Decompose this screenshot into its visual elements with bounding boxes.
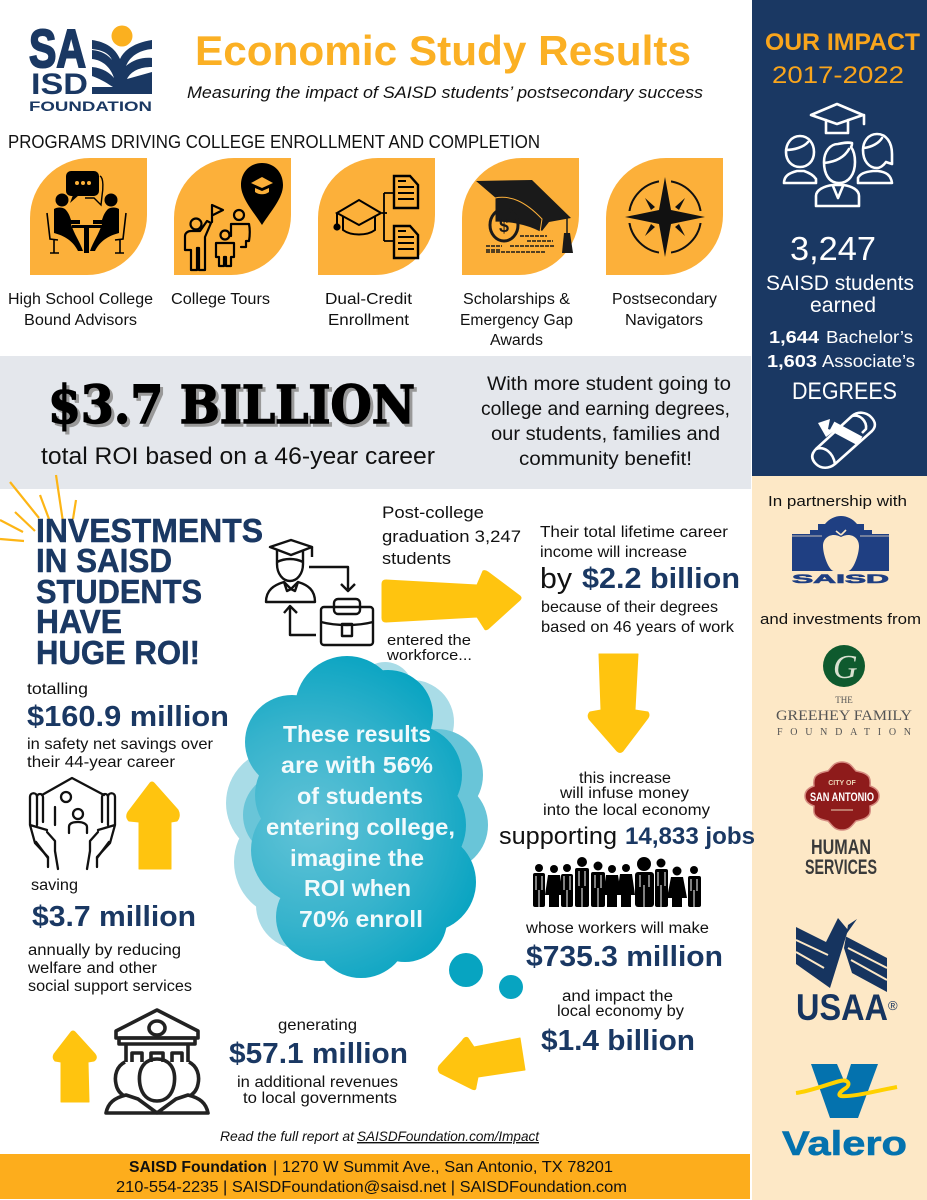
text: safety net — [27, 681, 229, 771]
footer — [0, 1154, 750, 1199]
arrow: up large — [127, 782, 179, 869]
degree counts: 1,603 — [767, 351, 817, 371]
logo: USAA — [796, 918, 898, 1028]
text: lifetime income: $2.2 billion — [582, 563, 740, 595]
text: government revenue: in additional revenues — [237, 1074, 398, 1091]
text: lifetime income — [540, 524, 740, 636]
program labels: Postsecondary — [612, 291, 717, 308]
cloud text: entering college, — [266, 814, 455, 840]
icon: cap with coin: $ — [499, 216, 509, 236]
degrees label: DEGREES — [792, 378, 897, 405]
panel: scholarships — [462, 158, 579, 275]
ROI description: community benefit! — [519, 449, 692, 470]
ROI caption: total ROI based on a 46-year career — [41, 443, 435, 470]
title: Economic Study Results — [195, 27, 691, 74]
decoration: sun rays — [0, 475, 76, 541]
ROI figure: $3.7 BILLION — [51, 378, 418, 439]
text: workers earn: and impact the — [562, 988, 673, 1005]
heading: investments: INVESTMENTS — [36, 512, 263, 549]
panel: ROI band — [0, 356, 751, 489]
panel: program advisors — [30, 158, 147, 275]
impact heading: OUR IMPACT — [765, 29, 920, 56]
cloud text: 70% enroll — [299, 906, 423, 932]
impact number: 3,247 — [790, 230, 876, 267]
panel: dual credit — [318, 158, 435, 275]
icon: advisors at table — [47, 171, 126, 253]
text: saving — [27, 877, 196, 995]
icon: graduates — [784, 104, 892, 206]
program labels: College Tours — [171, 291, 270, 308]
footer: SAISD Foundation — [129, 1159, 267, 1176]
text: safety net: their 44-year career — [27, 754, 176, 771]
logo: City of San Antonio Human Services: HUMAN — [811, 836, 871, 859]
logo: City of San Antonio Human Services: CITY OF — [828, 780, 856, 787]
programs heading: PROGRAMS DRIVING COLLEGE ENROLLMENT AND COMPLETION — [8, 132, 540, 152]
heading: investments: HAVE — [36, 603, 122, 640]
program labels: High School College — [8, 291, 153, 308]
logo: SAISD Foundation — [29, 19, 152, 114]
text: lifetime income: Their total lifetime career — [540, 524, 729, 541]
text: saving: welfare and other — [27, 960, 157, 977]
program labels: Navigators — [625, 312, 703, 329]
arrow: up small — [53, 1031, 96, 1102]
text: workers earn: whose workers will make — [525, 920, 709, 937]
text: government revenue: to local governments — [243, 1090, 397, 1107]
ROI description: college and earning degrees, — [481, 399, 730, 420]
text: entered workforce — [386, 632, 472, 664]
logo: SAISD: SAISD — [792, 572, 890, 586]
icon: workers — [533, 857, 701, 907]
impact years: 2017-2022 — [772, 62, 904, 89]
icon: map pin and group — [185, 163, 283, 270]
text: post-college: Post-college — [382, 503, 484, 522]
degree counts: Associate’s — [822, 351, 915, 371]
logo: Valero — [782, 1064, 907, 1163]
logo: SAISD — [792, 516, 890, 586]
logo: SAISD Foundation: ISD — [31, 68, 88, 101]
footer: | 1270 W Summit Ave., San Antonio, TX 78201 — [273, 1159, 613, 1176]
text: lifetime income: by — [540, 563, 573, 595]
cloud text: These results — [283, 721, 431, 747]
logo: USAA: USAA — [796, 987, 888, 1028]
text: workers earn — [525, 920, 723, 1057]
text: supporting jobs: supporting — [499, 823, 617, 850]
panel: college tours — [174, 158, 291, 275]
logo: SAISD Foundation: SA — [29, 19, 86, 79]
program labels: Awards — [490, 332, 543, 349]
partner intro: In partnership with — [768, 493, 907, 510]
logo: USAA: ® — [888, 998, 898, 1013]
program labels: Scholarships & — [463, 291, 571, 308]
logo: City of San Antonio Human Services: SAN ANTONIO — [810, 790, 874, 804]
logo: Greehey Family Foundation: THE — [835, 695, 853, 705]
ROI description: With more student going to — [487, 374, 731, 395]
subtitle: Measuring the impact of SAISD students’ postsecondary success — [187, 83, 704, 102]
panel: navigators — [606, 158, 723, 275]
heading: investments: IN SAISD — [36, 542, 172, 579]
impact caption — [766, 272, 914, 317]
impact caption: SAISD students — [766, 272, 914, 295]
text: supporting jobs — [499, 823, 755, 850]
heading: investments: HUGE ROI! — [36, 634, 200, 671]
text: post-college — [382, 503, 521, 568]
text: saving: saving — [31, 877, 78, 894]
text: government revenue: $57.1 million — [229, 1038, 408, 1070]
icon: cap and documents — [334, 176, 418, 258]
text: safety net: in safety net savings over — [27, 736, 214, 753]
text: safety net: $160.9 million — [27, 701, 229, 733]
panel: our impact — [752, 0, 927, 476]
logo: SAISD Foundation: FOUNDATION — [29, 99, 152, 114]
ROI description — [481, 374, 731, 470]
cloud text: ROI when — [304, 875, 411, 901]
logo: Greehey Family Foundation: FOUNDATION — [777, 727, 911, 738]
investors intro: and investments from — [760, 611, 921, 628]
cloud text: imagine the — [290, 845, 424, 871]
program labels: Enrollment — [328, 312, 410, 329]
text: lifetime income: income will increase — [540, 544, 687, 561]
logo: Greehey Family Foundation — [776, 645, 912, 738]
program labels — [8, 291, 717, 349]
text: saving: annually by reducing — [28, 942, 181, 959]
ROI figure: $3.7 BILLION — [48, 375, 415, 436]
logo: City of San Antonio Human Services — [805, 762, 879, 879]
icon: government building and people — [106, 1010, 208, 1113]
icon: caring hands — [30, 778, 115, 869]
program labels: Bound Advisors — [24, 312, 137, 329]
text: local economy: into the local economy — [543, 802, 710, 819]
ROI description: our students, families and — [491, 424, 720, 445]
text: entered workforce: workforce... — [386, 647, 472, 664]
logo: Greehey Family Foundation: GREEHEY FAMILY — [776, 708, 912, 724]
text: entered workforce: entered the — [387, 632, 471, 649]
text: local economy — [543, 770, 710, 819]
text: post-college: students — [382, 549, 451, 568]
text: workers earn: local economy by — [557, 1003, 684, 1020]
arrow: right — [382, 571, 521, 630]
report link — [220, 1128, 540, 1144]
arrow: down — [588, 654, 649, 752]
program labels: Emergency Gap — [460, 312, 573, 329]
text: post-college: graduation 3,247 — [382, 527, 521, 546]
report link: Read the full report at — [220, 1128, 355, 1144]
text: safety net: totalling — [27, 681, 88, 698]
icon: compass — [625, 177, 705, 257]
text: government revenue — [229, 1017, 408, 1107]
arrow: left — [438, 1037, 525, 1090]
logo: Greehey Family Foundation: G — [833, 649, 858, 686]
text: supporting jobs: 14,833 jobs — [625, 823, 755, 850]
logo: City of San Antonio Human Services: SERVICES — [805, 856, 877, 879]
panel: partners — [752, 476, 927, 1200]
cloud text: of students — [297, 783, 423, 809]
text: lifetime income: based on 46 years of work — [541, 619, 735, 636]
text: local economy: this increase — [579, 770, 671, 787]
footer: 210-554-2235 | SAISDFoundation@saisd.net | SAISDFoundation.com — [116, 1179, 627, 1196]
text: workers earn: $735.3 million — [526, 941, 723, 973]
heading: investments — [36, 512, 263, 671]
cloud callout — [226, 656, 488, 978]
thought bubbles — [449, 953, 523, 999]
cloud text — [266, 721, 455, 932]
report link: SAISDFoundation.com/Impact — [357, 1128, 540, 1144]
text: saving: social support services — [28, 978, 192, 995]
text: workers earn: $1.4 billion — [541, 1025, 695, 1057]
icon: diploma — [812, 413, 875, 468]
heading: investments: STUDENTS — [36, 573, 202, 610]
icon: graduate to workforce — [266, 540, 373, 645]
program labels: Dual-Credit — [325, 291, 413, 308]
degree counts — [767, 327, 915, 371]
text: government revenue: generating — [278, 1017, 357, 1034]
text: lifetime income: because of their degrees — [541, 599, 718, 616]
text: saving: $3.7 million — [32, 901, 196, 933]
degree counts: Bachelor’s — [826, 327, 913, 347]
cloud text: are with 56% — [281, 752, 433, 778]
impact caption: earned — [810, 294, 876, 317]
text: local economy: will infuse money — [559, 785, 689, 802]
logo: Valero: Valero — [782, 1125, 907, 1163]
degree counts: 1,644 — [769, 327, 819, 347]
